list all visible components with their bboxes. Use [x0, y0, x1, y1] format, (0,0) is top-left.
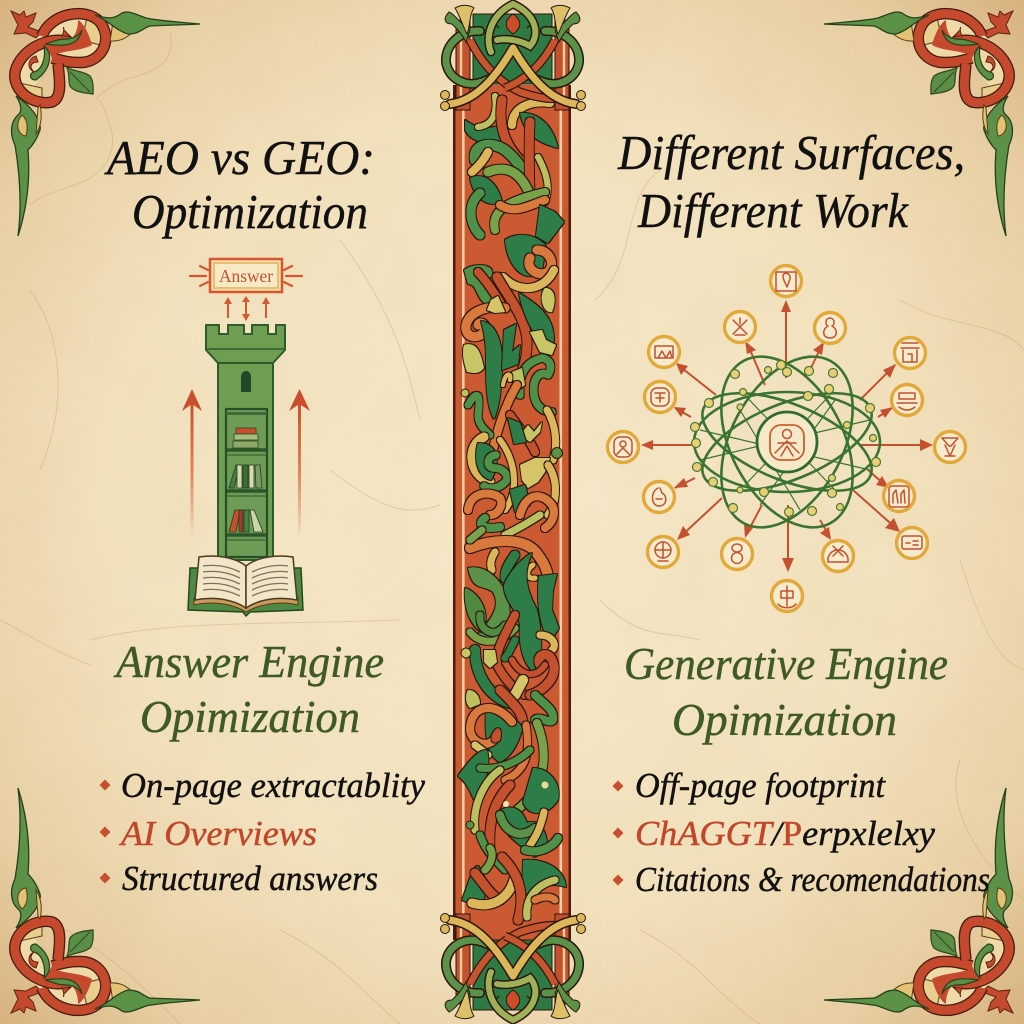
middle-lower section [470, 541, 548, 578]
network web [689, 334, 885, 550]
icon: answer box with rays [190, 259, 302, 321]
corner ornament: top right [824, 11, 1013, 236]
icon: satellite 11 [884, 480, 914, 512]
heading: answer engine optimization: Answer Engine [113, 637, 384, 687]
icon: satellite 10 [644, 482, 674, 512]
panel: central illuminated knotwork band [453, 85, 571, 940]
books: middle shelf [229, 465, 262, 488]
bullet list: AEO [100, 766, 425, 898]
icon: answer box with rays: Answer [219, 266, 273, 286]
icon: satellite 8 [608, 432, 638, 462]
icon: satellite 1 [770, 266, 802, 296]
icon: satellite 9 [934, 432, 966, 462]
icon: satellite 15 [822, 540, 854, 572]
arrow: rising right [289, 389, 310, 538]
network nodes [690, 360, 880, 516]
icon: satellite 13 [896, 528, 928, 558]
corner ornament: bottom left [11, 788, 200, 1013]
icon: satellite 7 [892, 384, 922, 416]
heading: generative engine optimization: Opimization [672, 695, 897, 745]
satellite icons [608, 266, 966, 612]
icon: green tower [188, 325, 303, 616]
icon: satellite 2 [724, 312, 756, 342]
icon: satellite 4 [648, 336, 680, 368]
heading: answer engine optimization [113, 637, 384, 742]
title left: Optimization [132, 184, 368, 239]
icon: satellite 12 [648, 536, 678, 568]
knotwork cap: top [440, 4, 586, 110]
middle-upper section [471, 193, 480, 235]
icon: satellite 14 [722, 538, 752, 570]
arrow: rising left [182, 389, 202, 538]
title right: Different Work [637, 183, 909, 238]
title right: Different Surfaces, [617, 125, 965, 180]
corner ornament: top left [11, 11, 200, 236]
heading: answer engine optimization: Opimization [140, 692, 360, 742]
icon: satellite 5 [894, 338, 926, 368]
title left [104, 130, 375, 239]
icon: satellite 3 [814, 312, 846, 344]
bullet list: GEO: ChAGGT/Perpxlelxy [635, 814, 935, 853]
title left: AEO vs GEO: [104, 130, 375, 185]
bullet list: AEO: Structured answers [122, 859, 378, 898]
bullet list: AEO: AI Overviews [119, 814, 317, 853]
icon: central glyph [770, 425, 804, 460]
bullet list: GEO [612, 766, 990, 899]
illustration: generative network [608, 266, 966, 612]
heading: generative engine optimization: Generative Engine [624, 639, 948, 689]
bullet list: AEO: On-page extractablity [121, 766, 425, 805]
bullet list: GEO: Citations & recomendations [635, 860, 990, 899]
bullet list: GEO: Off-page footprint [635, 766, 886, 805]
icon: satellite 16 [772, 580, 802, 612]
arrows: radiating spokes [641, 300, 933, 572]
books: bottom shelf [229, 510, 263, 532]
illustration: tower of knowledge [182, 259, 310, 616]
bottom section [462, 866, 486, 907]
knotwork cap: bottom [440, 914, 586, 1020]
icon: satellite 6 [644, 382, 676, 412]
heading: generative engine optimization [624, 639, 948, 745]
corner ornament: bottom right [824, 788, 1013, 1013]
top section [465, 120, 503, 143]
books: top shelf [233, 428, 258, 448]
icon: open book [188, 556, 303, 616]
title right [617, 125, 965, 238]
